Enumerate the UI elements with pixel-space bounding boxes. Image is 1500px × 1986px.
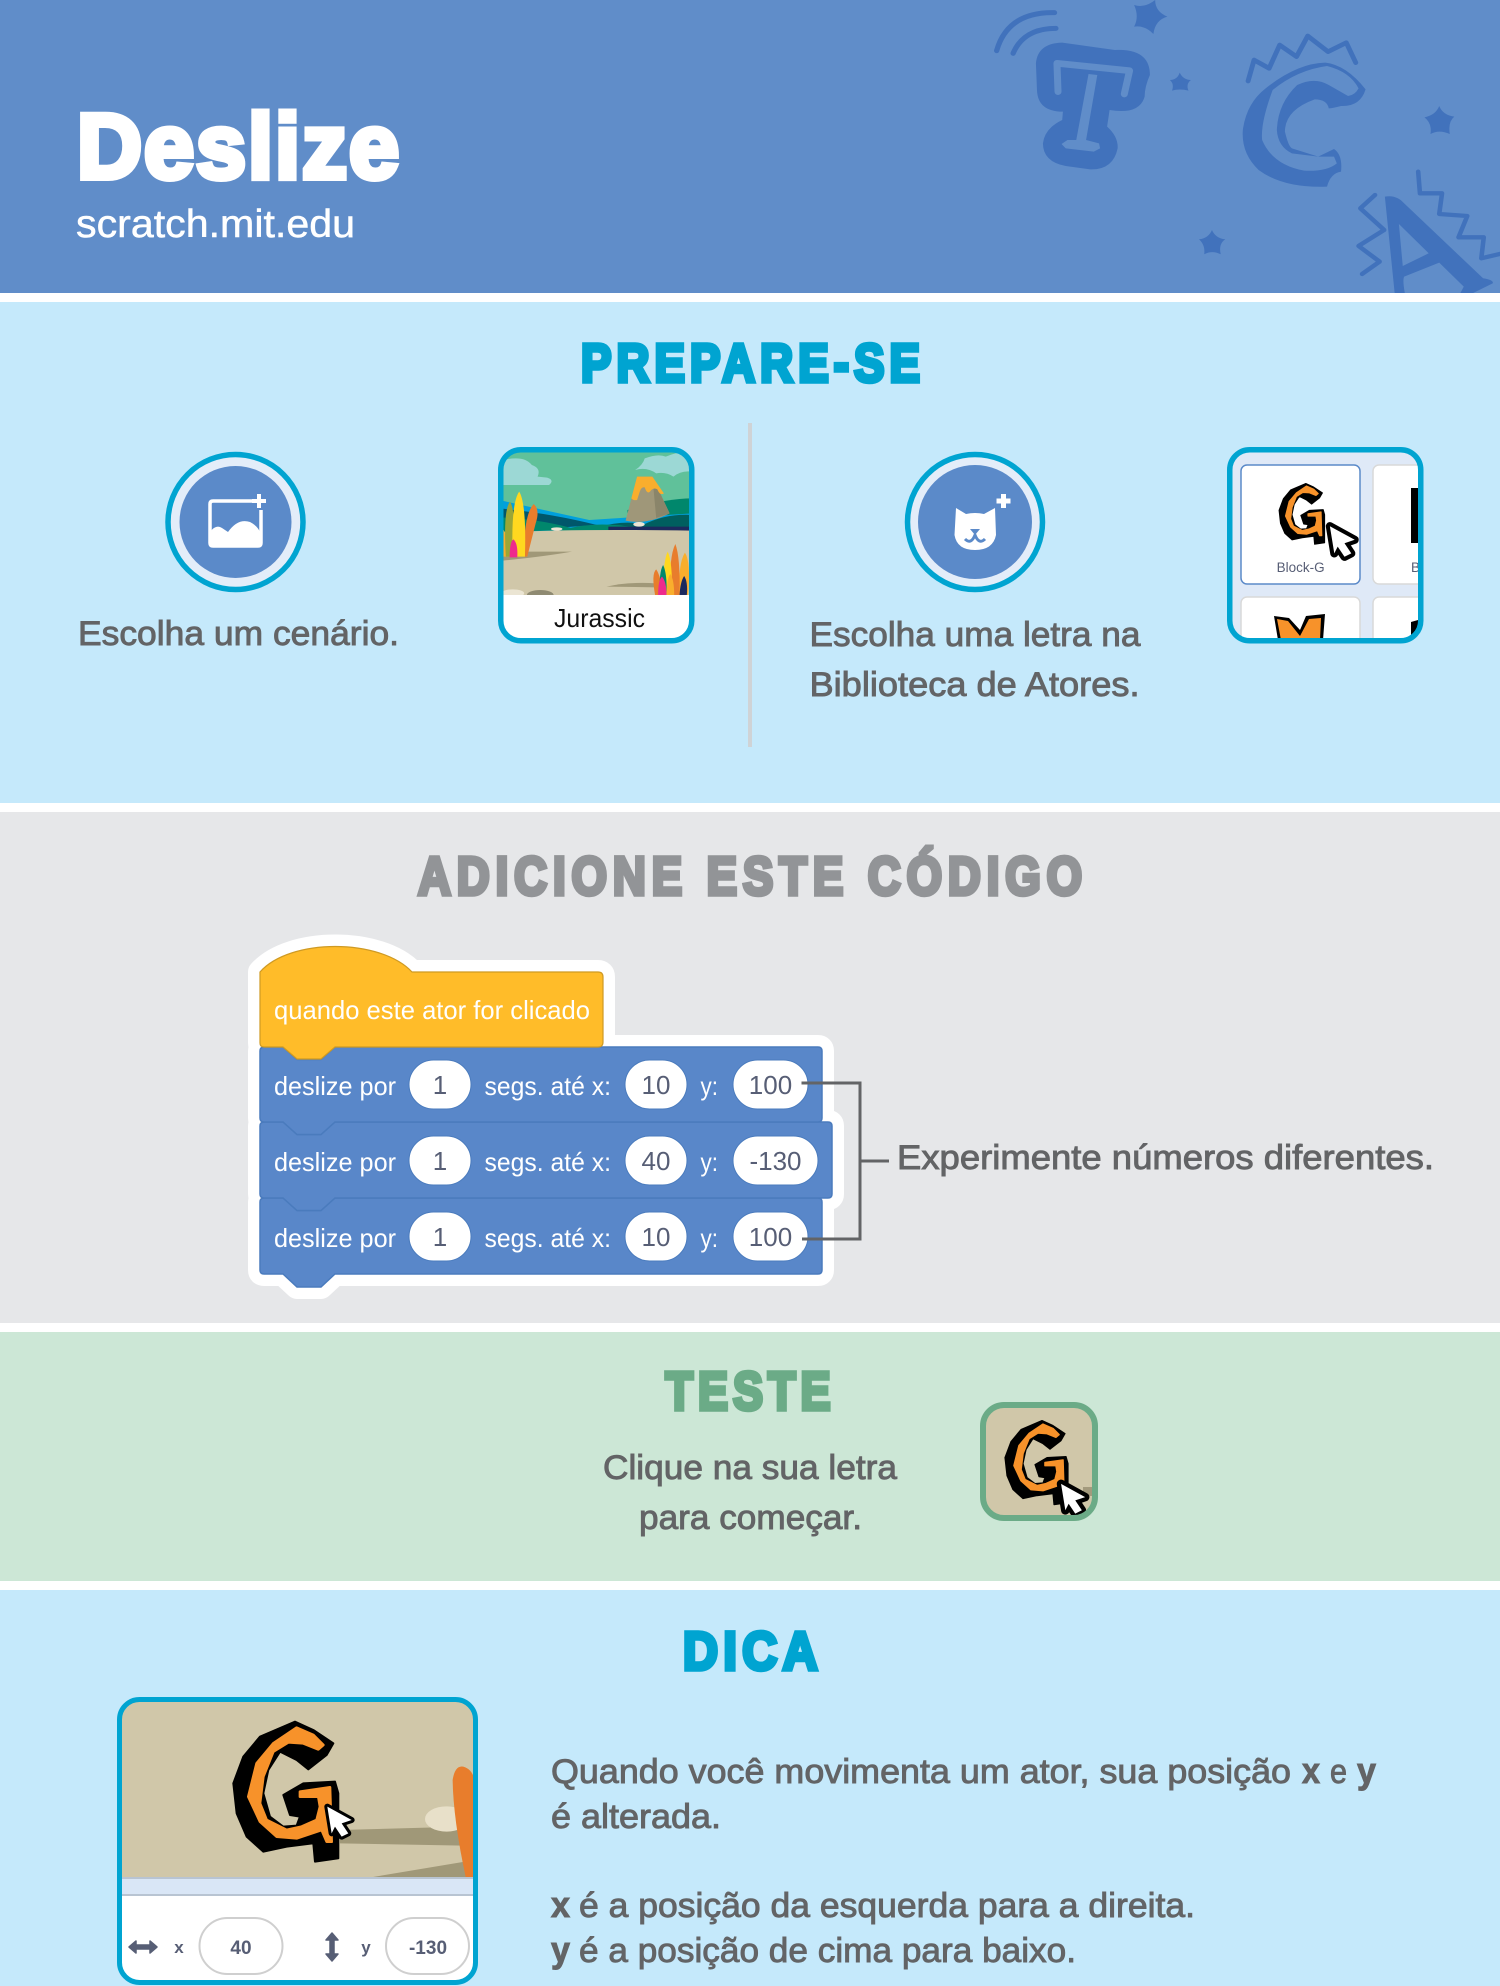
header decoration: letters and stars: [997, 0, 1500, 293]
card: Jurassic backdrop: Jurassic: [554, 603, 645, 633]
text: choose a letter: Escolha uma letra na: [810, 616, 1141, 654]
block: glide 2: deslize por: [274, 1147, 396, 1177]
panel: add this code: [0, 812, 1500, 1323]
block: glide 1: 10: [642, 1070, 670, 1100]
text: position explanation: é a posição de cima para baixo.: [579, 1932, 1076, 1970]
bracket connector: [802, 1083, 889, 1239]
icon: letter G sprite in library: [1279, 483, 1325, 544]
card: sprite library: Block-G: [1277, 560, 1325, 575]
text: position explanation: é a posição da esquerda para a direita.: [579, 1887, 1195, 1925]
text: position explanation: Quando você movimenta um ator, sua posição: [551, 1753, 1291, 1791]
code blocks: [260, 946, 832, 1287]
block: glide 3: 100: [749, 1222, 792, 1252]
panel: test: [0, 1332, 1500, 1581]
block: glide 3: y:: [700, 1223, 718, 1253]
block: glide 1: 1: [433, 1070, 447, 1100]
heading: add this code: ADICIONE ESTE CÓDIGO: [418, 846, 1088, 906]
block: when this sprite clicked: [260, 946, 603, 1059]
icon: letter G sprite: [233, 1722, 338, 1862]
card: Jurassic backdrop: [497, 447, 696, 645]
text: click your letter: [603, 1449, 897, 1537]
heading: test: TESTE: [666, 1362, 836, 1422]
icon: cursor: [1061, 1484, 1085, 1514]
panel: tip: [0, 1590, 1500, 1986]
block: glide 3: [260, 1198, 822, 1287]
block: glide 3: deslize por: [274, 1223, 396, 1253]
icon: choose sprite button: [908, 454, 1042, 590]
block: when this sprite clicked: quando este ator for clicado: [274, 995, 590, 1025]
block: glide 1: 100: [749, 1070, 792, 1100]
text: choose backdrop: Escolha um cenário.: [78, 615, 399, 653]
card: sprite library: [1227, 447, 1424, 644]
text: position explanation: e: [1330, 1753, 1347, 1791]
subtitle: site url: scratch.mit.edu: [76, 203, 355, 246]
heading: prepare: PREPARE-SE: [581, 334, 925, 394]
icon: cursor: [1330, 526, 1355, 557]
text: click your letter: para começar.: [639, 1499, 862, 1537]
block: glide 3: 10: [642, 1222, 670, 1252]
text: position explanation: y: [1357, 1750, 1376, 1791]
block: glide 2: 40: [642, 1146, 670, 1176]
block: glide 2: -130: [749, 1146, 802, 1176]
card: sprite library: B: [1411, 560, 1420, 575]
block: glide 1: segs. até x:: [484, 1071, 611, 1101]
icon: choose backdrop button: [168, 454, 303, 590]
text: try different numbers: Experimente números diferentes.: [897, 1139, 1434, 1177]
text: position explanation: [551, 1750, 1376, 1970]
card: stage with x and y position: [110, 1690, 490, 1982]
icon: cursor: [327, 1807, 352, 1837]
panel: header: [0, 0, 1500, 293]
text: position explanation: y: [551, 1929, 570, 1970]
block: glide 2: y:: [700, 1147, 718, 1177]
block: glide 2: 1: [433, 1146, 447, 1176]
block: glide 2: [260, 1122, 832, 1210]
text: position explanation: é alterada.: [551, 1798, 721, 1836]
block: glide 1: [260, 1047, 822, 1134]
block: glide 1: y:: [700, 1071, 718, 1101]
icon: horizontal arrow: [129, 1941, 157, 1953]
text: position explanation: x: [1302, 1750, 1320, 1791]
heading: tip: DICA: [683, 1622, 823, 1682]
icon: letter G tile: [983, 1405, 1097, 1518]
card: stage with x and y position: 40: [230, 1938, 252, 1959]
icon: letter G sprite: [1005, 1421, 1068, 1505]
icon: vertical arrow: [326, 1933, 338, 1961]
card: stage with x and y position: x: [174, 1938, 184, 1957]
title: Deslize: [77, 96, 401, 198]
card: stage with x and y position: -130: [409, 1938, 447, 1959]
card: stage with x and y position: y: [361, 1938, 371, 1957]
text: position explanation: x: [551, 1884, 570, 1925]
text: click your letter: Clique na sua letra: [603, 1449, 897, 1487]
panel: prepare: [0, 302, 1500, 803]
block: glide 3: segs. até x:: [484, 1223, 611, 1253]
block: glide 3: 1: [433, 1222, 447, 1252]
text: choose a letter: [810, 616, 1141, 704]
block: glide 1: deslize por: [274, 1071, 396, 1101]
text: choose a letter: Biblioteca de Atores.: [810, 666, 1140, 704]
divider: [748, 423, 752, 747]
block: glide 2: segs. até x:: [484, 1147, 611, 1177]
